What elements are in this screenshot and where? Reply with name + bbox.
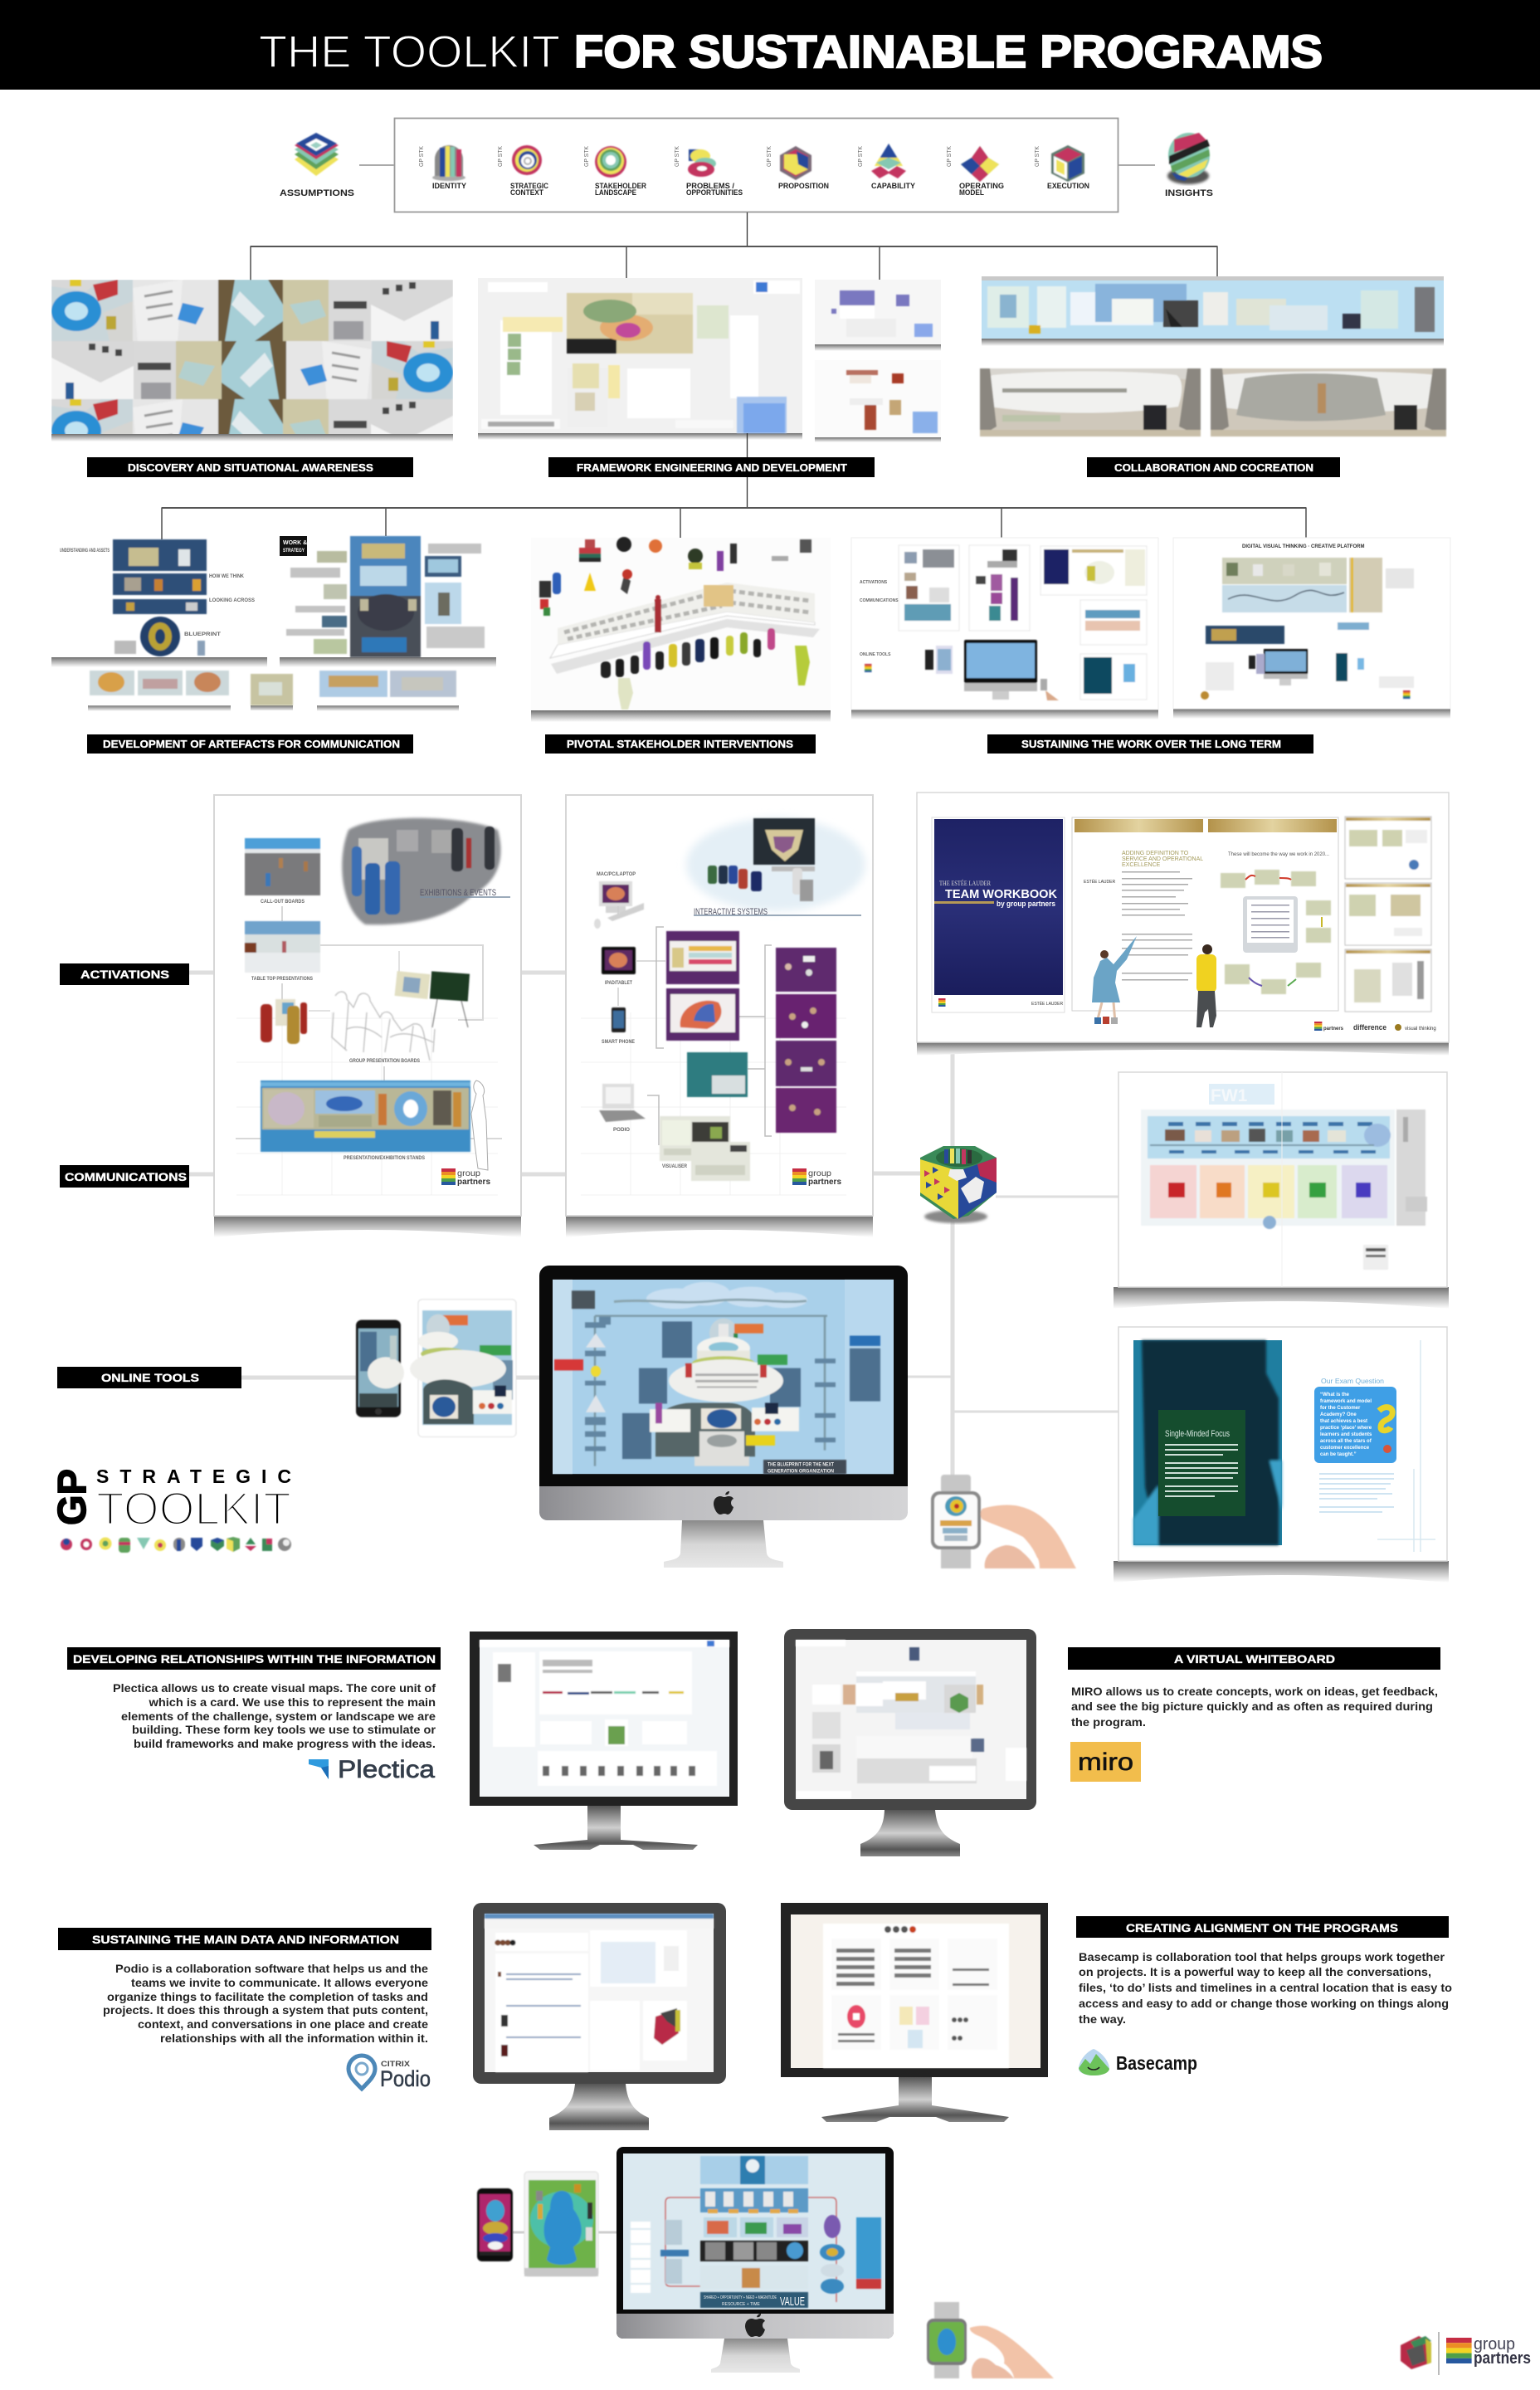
image: tablet [602,947,636,974]
device: bottom phone [477,2188,513,2261]
device: bottom imac [616,2147,894,2373]
panel: single-minded focus spread [1114,1327,1449,1583]
gp stk vertical tags [419,146,1040,167]
title text: FOR SUSTAINABLE PROGRAMS [574,26,1323,77]
body: podio: projects. It does this through a system that puts content, [103,2003,428,2017]
title text [259,26,1323,77]
body: podio: Podio is a collaboration software that helps us and the [115,1962,428,1975]
toolkit items: STRATEGIC [510,182,548,190]
logo: podio: Podio [380,2066,431,2091]
panel: communications sheet: INTERACTIVE SYSTEMS [694,907,768,917]
toolkit items: OPPORTUNITIES [686,188,743,197]
toolkit items: MODEL [959,188,984,197]
logo: group partners: group [808,1169,831,1178]
heading: developing relationships: DEVELOPING RELATIONSHIPS WITHIN THE INFORMATION [73,1652,436,1666]
panel: communications sheet [566,795,873,1237]
image: sketched audience [332,992,435,1061]
body: miro: and see the big picture quickly and as often as required during [1071,1700,1433,1713]
toolkit frame [395,118,1118,212]
heading: discovery [87,457,413,477]
body: podio: teams we invite to communicate. It allows everyone [131,1976,428,1989]
workbook spread: ESTÉE LAUDER [1084,879,1115,885]
body: basecamp: Basecamp is collaboration tool that helps groups work together [1079,1950,1445,1963]
icon: operating model [961,146,999,182]
panel: framework wall FW1 [1114,1072,1449,1309]
logo: GP strategic toolkit: GP [51,1469,95,1525]
panel: activations sheet: GROUP PRESENTATION BOARDS [349,1058,421,1064]
title text: THE TOOLKIT [259,26,560,77]
logo row [1314,1022,1436,1032]
callout: blue question card: Academy? One [1320,1412,1357,1417]
gp stk vertical tags: GP STK [1035,146,1040,167]
panel: framework small board bottom [815,360,941,442]
image: table top presentation [245,921,320,973]
panel: pivotal stakeholder scene [531,537,831,722]
panel: sustaining sheet one: COMMUNICATIONS [860,598,899,603]
callout: blue question card: customer excellence [1320,1446,1370,1451]
panel: artefact sheet one: HOW WE THINK [209,573,244,579]
panel: communications sheet: SMART PHONE [602,1039,636,1045]
gp stk vertical tags: GP STK [675,146,680,167]
logo: GP strategic toolkit [51,1466,291,1553]
icon: assumptions [280,133,354,198]
panel: activations sheet [214,795,521,1237]
toolkit items: CAPABILITY [871,182,915,190]
panel: sustaining sheet one: ACTIVATIONS [860,580,888,585]
tree connector upper [251,212,1217,282]
icon: problems and opportunities [688,149,716,177]
image: laptop [599,1084,646,1122]
heading: framework [548,457,875,477]
image: desktop computer [594,881,644,929]
toolkit items: EXECUTION [1047,182,1089,190]
body: miro [1071,1685,1438,1729]
heading: a virtual whiteboard: A VIRTUAL WHITEBOARD [1174,1652,1335,1666]
heading: sustaining main data: SUSTAINING THE MAIN DATA AND INFORMATION [92,1933,399,1946]
screen content [623,2153,885,2310]
logo: group partners footer [1401,2332,1531,2375]
icon: gp book cube [1401,2336,1431,2369]
device: hero imac [539,1266,908,1568]
toolkit items: IDENTITY [432,182,466,190]
panel: activations sheet: PRESENTATION/EXHIBITION STANDS [344,1155,426,1161]
toolkit items: PROPOSITION [778,182,829,190]
body: basecamp: access and easy to add or change those working on things along [1079,1997,1449,2010]
label: communications: COMMUNICATIONS [65,1170,187,1183]
panel: artefact sheet one: BLUEPRINT [184,632,221,637]
panel: artefact sheet one: LOOKING ACROSS [209,598,256,603]
screen content: VALUE [780,2295,805,2309]
logo: group partners: group [457,1169,480,1178]
image: blue textured page: Single-Minded Focus [1165,1429,1230,1439]
heading: developing relationships [67,1647,441,1670]
icon: execution [1051,145,1084,182]
heading: collaboration [1087,457,1340,477]
heading: creating alignment [1076,1916,1449,1938]
workbook cover: THE ESTÉE LAUDER [939,879,992,887]
image: purple interactive screens [666,931,739,1041]
toolkit connector lines [189,973,1124,1475]
image: presentation boards [395,971,470,1027]
panel: artefact sheet two: STRATEGY [283,549,305,554]
heading: sustaining: SUSTAINING THE WORK OVER THE LONG TERM [1021,738,1281,750]
logo: group partners [441,1168,490,1187]
panel: sustaining sheet two: DIGITAL VISUAL THINKING · CREATIVE PLATFORM [1242,544,1364,549]
image: visualiser [660,1116,750,1181]
bottom device connector [513,2231,616,2234]
image: smart phone [612,1007,626,1032]
body: plectica: elements of the challenge, system or landscape we are [121,1710,436,1723]
text block: miro [1068,1647,1440,1782]
heading: a virtual whiteboard [1068,1647,1440,1670]
body: plectica: Plectica allows us to create visual maps. The core unit of [113,1681,436,1695]
panel: sustaining sheet one [851,538,1158,719]
icon: assumptions: ASSUMPTIONS [280,188,354,198]
gp stk vertical tags: GP STK [584,146,590,167]
panel: activations sheet: EXHIBITIONS & EVENTS [420,888,496,898]
logo: group partners footer: group [1474,2335,1515,2353]
text block: basecamp [1076,1916,1452,2075]
image: presenters [261,999,307,1044]
workbook spread: ADDING DEFINITION TO [1122,851,1189,856]
heading: pivotal: PIVOTAL STAKEHOLDER INTERVENTIONS [567,738,793,750]
logo row: partners [1323,1027,1344,1032]
workbook cover [932,817,1065,1012]
logo row: difference [1353,1023,1386,1032]
screen content: THE BLUEPRINT FOR THE NEXT [768,1462,834,1468]
logo: basecamp [1079,2049,1197,2075]
screen content [553,1280,894,1474]
image: exhibitions and events [342,818,501,924]
logo: podio: CITRIX [381,2060,410,2068]
panel: discovery collage [51,280,453,461]
body: basecamp [1079,1950,1452,2026]
toolkit items: LANDSCAPE [595,188,636,197]
panel: artefact sheet one: UNDERSTANDING AND ASSETS [60,548,110,554]
illustration: woman pointing [1092,936,1137,1024]
toolkit items: STAKEHOLDER [595,182,646,190]
panel: sustaining sheet two [1173,538,1450,719]
screen content: SHARED + OPPORTUNITY + NEED + MAGNITUDE [704,2295,777,2300]
panel: team workbook [917,793,1449,1056]
body: basecamp: on projects. It is a powerful way to keep all the conversations, [1079,1965,1431,1978]
panel: communications sheet: MAC/PC/LAPTOP [597,871,636,877]
workbook thumbnails [1345,817,1431,1012]
icon: stakeholder landscape [595,146,626,178]
workbook spread: SERVICE AND OPERATIONAL [1122,856,1203,862]
logo: group partners [792,1168,841,1187]
seated audience [601,628,775,678]
panel: sustaining sheet one: ONLINE TOOLS [860,652,891,657]
body: plectica [113,1681,436,1750]
artefact thumbnails row [88,669,459,711]
callout: blue question card: “What is the [1320,1393,1350,1397]
body: podio [103,1962,428,2045]
device: tablet [410,1300,516,1436]
device: miro monitor [784,1629,1036,1856]
body: plectica: building. These form key tools we use to stimulate or [132,1723,436,1736]
logo: group partners: partners [457,1178,490,1187]
label: online tools [57,1367,241,1388]
label: activations [60,963,189,985]
icon: insights [1165,133,1213,198]
heading: sustaining main data [58,1928,431,1950]
body: basecamp: the way. [1079,2012,1126,2026]
image: teal screen [687,1052,748,1097]
logo: plectica [309,1756,435,1783]
callout: blue question card: framework and model [1320,1399,1372,1404]
image: interactive systems [686,818,865,911]
device: bottom tablet [524,2172,598,2276]
illustration: man in yellow [1196,944,1216,1027]
callout: blue question card: that achieves a best [1320,1419,1367,1424]
image: purple column screens [776,948,836,1133]
workbook spread: These will become the way we work in 2020... [1228,852,1329,857]
logo: basecamp: Basecamp [1116,2052,1197,2074]
logo: miro [1070,1742,1141,1782]
curved presentation wall [550,583,820,674]
panel: activations sheet: TABLE TOP PRESENTATIONS [251,976,314,982]
panel: communications sheet: PODIO [613,1127,630,1133]
heading: artefacts: DEVELOPMENT OF ARTEFACTS FOR COMMUNICATION [103,738,400,750]
gp stk vertical tags: GP STK [947,146,953,167]
callout: blue question card: learners and students [1320,1432,1372,1437]
workbook cover: by group partners [997,900,1055,908]
callout: blue question card: practice ‘place’ where [1320,1426,1372,1431]
toolkit items: OPERATING [959,182,1004,190]
image: exhibition stand [261,1080,470,1152]
heading: discovery: DISCOVERY AND SITUATIONAL AWARENESS [128,461,373,474]
panel: framework wall FW1: FW1 [1211,1086,1248,1105]
gp stk vertical tags: GP STK [767,146,772,167]
device: phone [356,1319,404,1417]
heading: our exam question: Our Exam Question [1321,1378,1384,1385]
label: communications [60,1165,189,1188]
panel: artefact sheet two [280,536,496,667]
image: blue textured page [1133,1340,1282,1545]
tree connector lower [162,433,1306,544]
logo: group partners: partners [808,1178,841,1187]
panel: collaboration room panoramas [980,368,1446,437]
body: podio: context, and conversations in one place and create [138,2017,428,2031]
icon: strategic context [512,145,542,175]
toolkit items: CONTEXT [510,188,543,197]
toolkit items [419,144,1089,197]
device: watch and hand [931,1475,1076,1568]
logo: GP strategic toolkit: TOOLKIT [96,1482,291,1534]
heading: pivotal [545,734,816,754]
panel: framework whiteboard [478,278,802,440]
panel: artefact sheet one [51,539,267,667]
body: basecamp: files, ‘to do’ lists and timelines in a central location that is easy to [1079,1981,1452,1994]
gp stk vertical tags: GP STK [419,146,425,167]
device: plectica monitor [470,1632,738,1850]
heading: creating alignment: CREATING ALIGNMENT ON THE PROGRAMS [1126,1921,1398,1934]
device: bottom watch and hand [927,2302,1054,2378]
image: call-out board [245,838,320,895]
workbook spread: EXCELLENCE [1122,862,1161,868]
logo: plectica: Plectica [338,1756,435,1783]
logo: miro: miro [1078,1749,1133,1776]
logo row: visual thinking [1405,1027,1436,1032]
icon: capability [871,144,906,178]
body: plectica: build frameworks and make progress with the ideas. [134,1737,436,1750]
title band [0,0,1540,90]
body: miro: MIRO allows us to create concepts, work on ideas, get feedback, [1071,1685,1438,1698]
heading: collaboration: COLLABORATION AND COCREATION [1114,461,1313,474]
panel: artefact sheet two: WORK & [283,540,307,546]
callout: blue question card: for the Customer [1320,1406,1361,1411]
workbook spread [1072,817,1338,1011]
heading: artefacts [87,734,413,754]
device: podio monitor [473,1903,726,2130]
body: miro: the program. [1071,1715,1146,1729]
icon: toolkit cube [920,1146,997,1223]
scattered icons [539,537,811,616]
screen content: GENERATION ORGANIZATION [768,1468,834,1474]
panel: communications sheet: IPAD/TABLET [605,980,632,986]
panel: activations sheet: CALL-OUT BOARDS [261,899,305,905]
panel: framework small board top [815,280,941,351]
callout: blue question card [1314,1387,1396,1463]
toolkit icon strip [61,1537,291,1553]
logo: GP strategic toolkit: STRATEGIC [96,1466,291,1487]
workbook cover: TEAM WORKBOOK [945,887,1057,901]
device: basecamp monitor [781,1903,1048,2122]
heading: framework: FRAMEWORK ENGINEERING AND DEVELOPMENT [577,461,847,474]
gp stk vertical tags: GP STK [858,146,864,167]
body: plectica: which is a card. We use this to represent the main [148,1695,436,1709]
screen content: RESOURCE + TIME [722,2302,761,2307]
icon: insights: INSIGHTS [1165,188,1213,198]
icon: identity [432,145,465,181]
icon: proposition [780,146,811,180]
text block: plectica [67,1647,441,1783]
panel: collaboration wall strip [982,276,1444,346]
callout: blue question card: can be taught.” [1320,1452,1357,1457]
label: online tools: ONLINE TOOLS [101,1371,199,1384]
callout: blue question card: across all the stars of [1320,1439,1372,1444]
panel: communications sheet: VISUALISER [662,1163,687,1169]
heading: sustaining [987,734,1313,754]
workbook cover: ESTÉE LAUDER [1031,1001,1063,1007]
body: podio: organize things to facilitate the completion of tasks and [107,1990,428,2003]
logo: group partners footer: partners [1474,2349,1531,2368]
toolkit items: PROBLEMS / [686,182,735,190]
label: activations: ACTIVATIONS [80,968,169,981]
gp stk vertical tags: GP STK [498,146,504,167]
body: podio: relationships with all the information within it. [160,2032,428,2045]
logo: podio [348,2056,431,2091]
text block: podio [58,1928,431,2091]
